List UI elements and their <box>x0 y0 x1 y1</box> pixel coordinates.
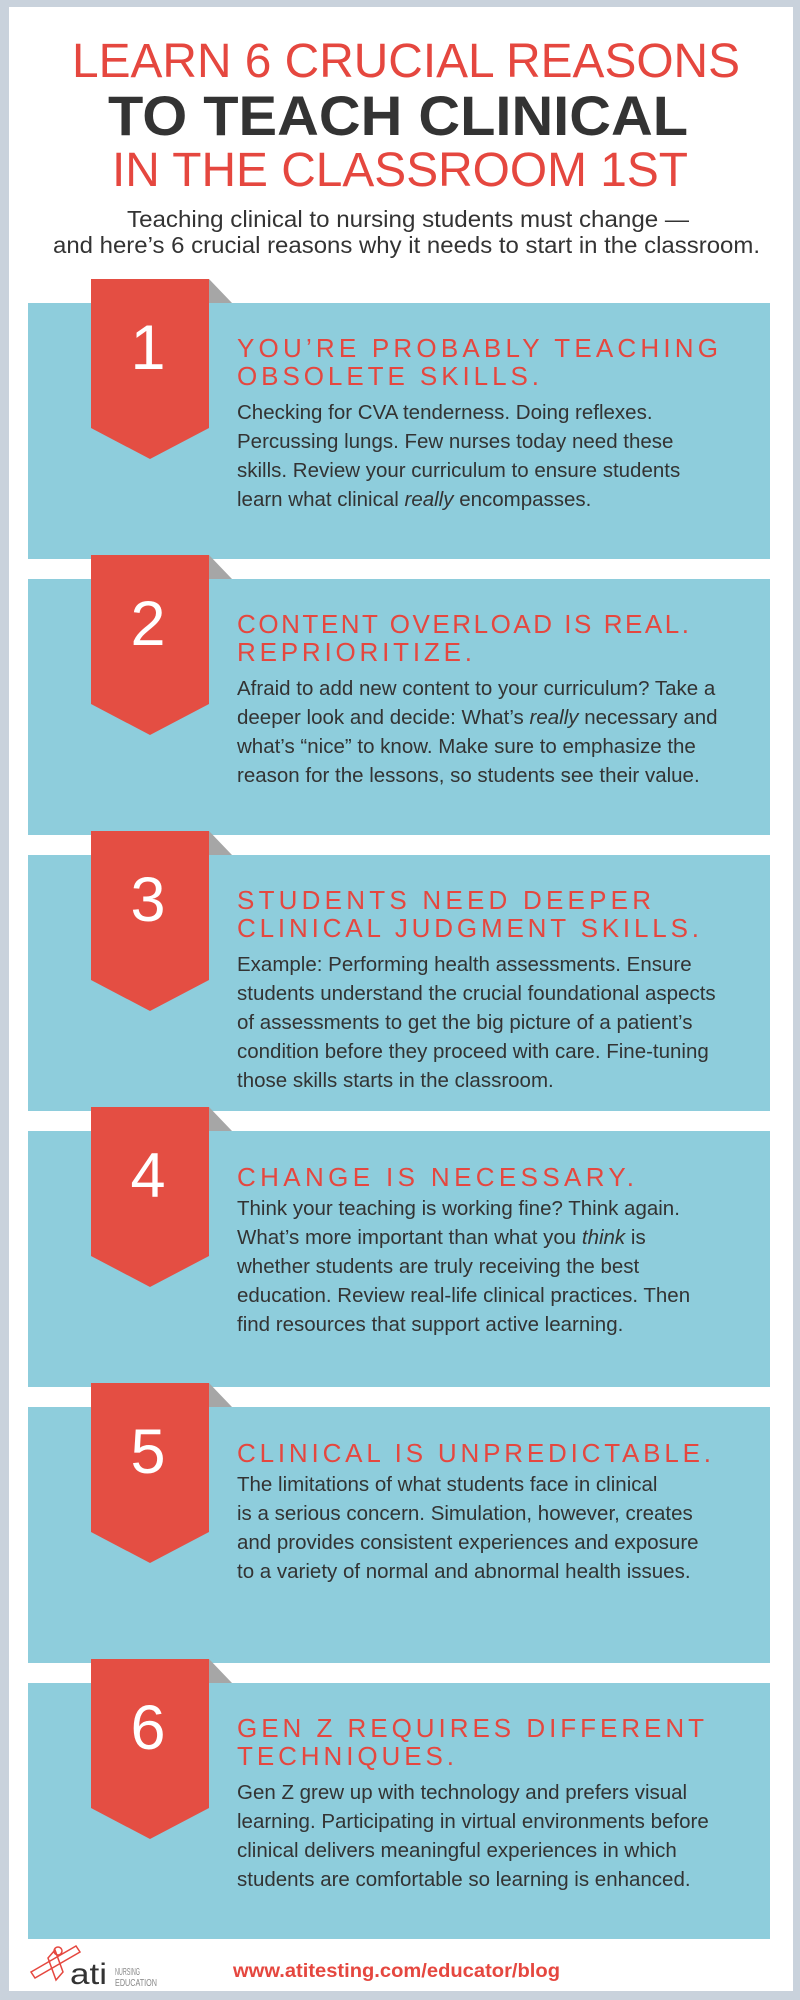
ribbon 4: 4 <box>130 1141 166 1211</box>
body 3: those skills starts in the classroom. <box>237 1069 554 1092</box>
heading 2: REPRIORITIZE. <box>237 637 472 667</box>
body 5: to a variety of normal and abnormal health issues. <box>237 1560 691 1583</box>
body 2: Afraid to add new content to your curriculum? Take a <box>237 677 716 700</box>
body 6: clinical delivers meaningful experiences in which <box>237 1839 677 1862</box>
body 6: students are comfortable so learning is enhanced. <box>237 1868 691 1891</box>
body 5: is a serious concern. Simulation, however, creates <box>237 1502 693 1525</box>
body 1: skills. Review your curriculum to ensure students <box>237 459 680 482</box>
body 5: and provides consistent experiences and exposure <box>237 1531 699 1554</box>
ribbon 2: 2 <box>130 589 166 659</box>
body 6: learning. Participating in virtual environments before <box>237 1810 709 1833</box>
panel: reason 3 <box>28 831 770 1111</box>
body 3: students understand the crucial foundational aspects <box>237 982 716 1005</box>
panel: reason 1 <box>28 279 770 559</box>
logo: ATI Nursing Education <box>31 1946 157 1991</box>
heading 2: CONTENT OVERLOAD IS REAL. <box>237 609 689 639</box>
title: TO TEACH CLINICAL <box>108 84 688 147</box>
heading 1: YOU’RE PROBABLY TEACHING <box>237 333 718 363</box>
subtitle <box>53 206 760 258</box>
subtitle: and here’s 6 crucial reasons why it needs to start in the classroom. <box>53 232 760 258</box>
ribbon 5 <box>91 1383 232 1563</box>
heading 3 <box>237 885 699 943</box>
body 4: education. Review real-life clinical practices. Then <box>237 1284 690 1307</box>
heading 3: STUDENTS NEED DEEPER <box>237 885 651 915</box>
heading 6: GEN Z REQUIRES DIFFERENT <box>237 1713 704 1743</box>
ribbon 1: 1 <box>130 313 166 383</box>
logo: ATI Nursing Education: ati <box>70 1958 107 1991</box>
ribbon 3 <box>91 831 232 1011</box>
body 6: Gen Z grew up with technology and prefers visual <box>237 1781 687 1804</box>
logo: ATI Nursing Education: NURSING <box>115 1967 140 1978</box>
body 4: find resources that support active learning. <box>237 1313 623 1336</box>
body 4: What’s more important than what you think is <box>237 1226 646 1249</box>
body 1: Percussing lungs. Few nurses today need these <box>237 430 673 453</box>
panel: reason 5 <box>28 1383 770 1663</box>
logo: ATI Nursing Education: EDUCATION <box>115 1978 157 1989</box>
heading 6: TECHNIQUES. <box>237 1741 454 1771</box>
title <box>72 35 740 197</box>
ribbon 1 <box>91 279 232 459</box>
heading 6 <box>237 1713 704 1771</box>
panel: reason 6 <box>28 1659 770 1939</box>
title: IN THE CLASSROOM 1ST <box>112 144 688 197</box>
body 3: condition before they proceed with care. Fine-tuning <box>237 1040 709 1063</box>
heading 5: CLINICAL IS UNPREDICTABLE. <box>237 1438 711 1468</box>
footer url: www.atitesting.com/educator/blog <box>232 1961 560 1982</box>
heading 4: CHANGE IS NECESSARY. <box>237 1162 634 1192</box>
heading 1: OBSOLETE SKILLS. <box>237 361 539 391</box>
heading 1 <box>237 333 718 391</box>
body 4: whether students are truly receiving the best <box>236 1255 640 1278</box>
body 1: learn what clinical really encompasses. <box>237 488 591 511</box>
body 5: The limitations of what students face in clinical <box>237 1473 657 1496</box>
subtitle: Teaching clinical to nursing students must change — <box>127 206 689 232</box>
panel: reason 2 <box>28 555 770 835</box>
heading 2 <box>237 609 689 667</box>
body 4: Think your teaching is working fine? Think again. <box>237 1197 680 1220</box>
ribbon 6 <box>91 1659 232 1839</box>
ribbon 6: 6 <box>130 1693 166 1763</box>
body 3: Example: Performing health assessments. Ensure <box>237 953 692 976</box>
body 2: what’s “nice” to know. Make sure to emphasize the <box>236 735 696 758</box>
panel: reason 4 <box>28 1107 770 1387</box>
body 1: Checking for CVA tenderness. Doing reflexes. <box>237 401 653 424</box>
ribbon 4 <box>91 1107 232 1287</box>
ribbon 5: 5 <box>130 1417 166 1487</box>
heading 3: CLINICAL JUDGMENT SKILLS. <box>237 913 699 943</box>
ribbon 2 <box>91 555 232 735</box>
ribbon 3: 3 <box>130 865 166 935</box>
body 2: deeper look and decide: What’s really necessary and <box>237 706 718 729</box>
body 2: reason for the lessons, so students see their value. <box>237 764 700 787</box>
title: LEARN 6 CRUCIAL REASONS <box>72 35 740 88</box>
body 3: of assessments to get the big picture of a patient’s <box>237 1011 692 1034</box>
